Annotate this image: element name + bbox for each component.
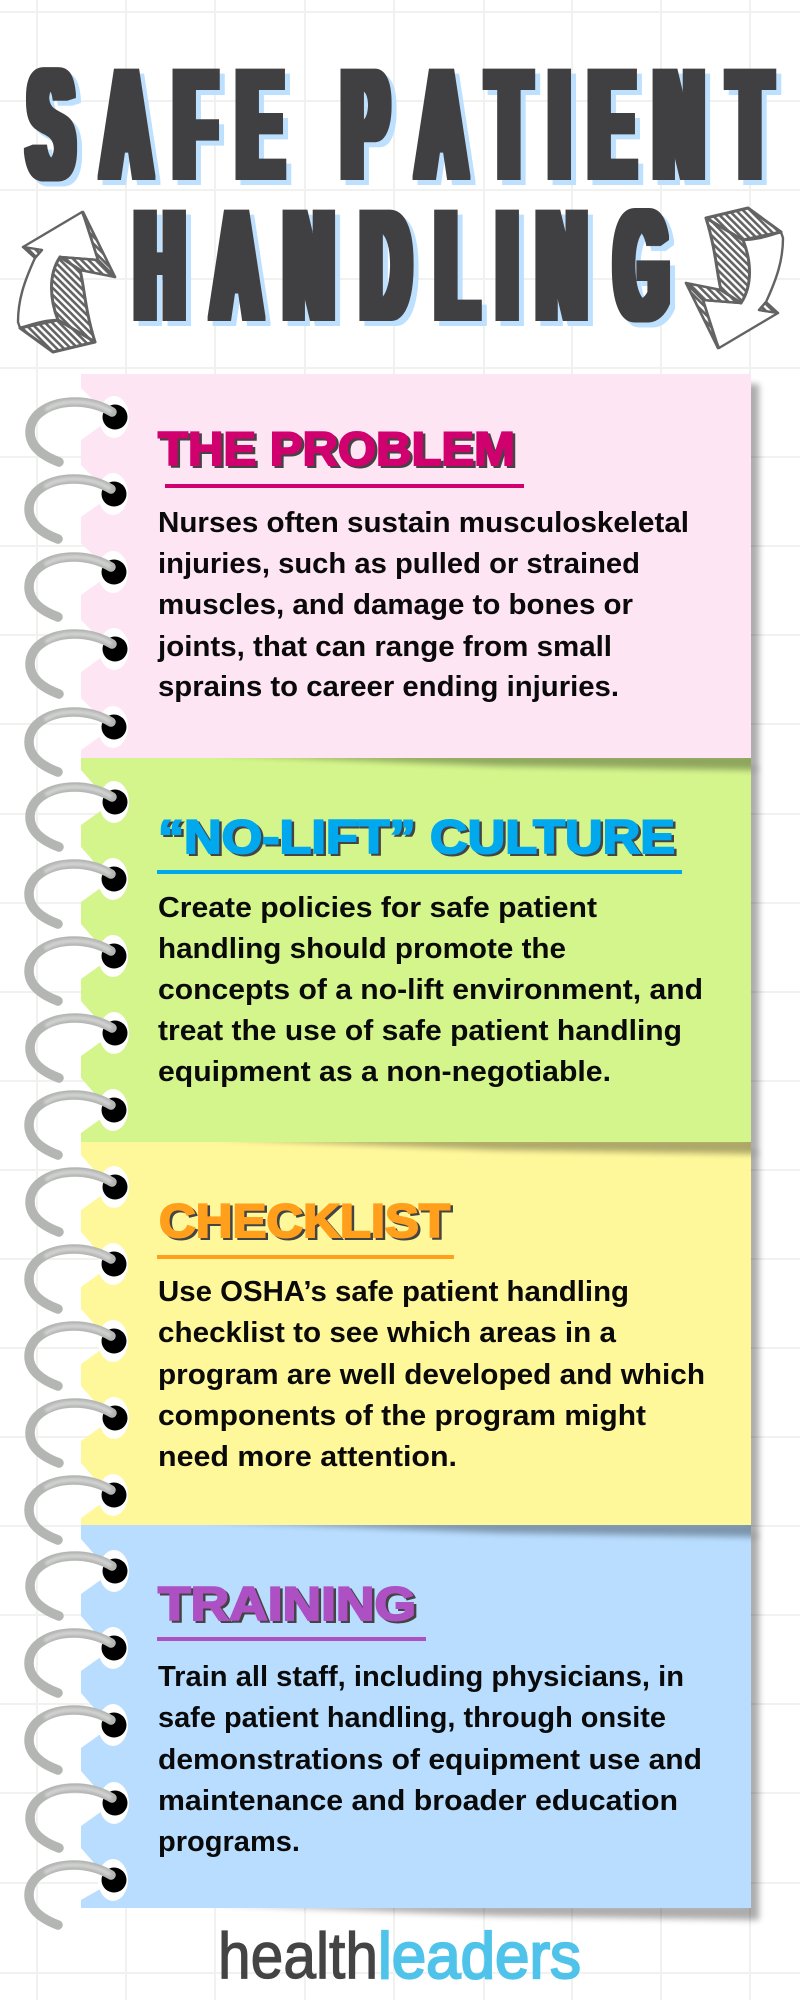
- panel: the problem: [81, 374, 759, 770]
- logo: healthleaders: [218, 1919, 581, 1992]
- panel background: [81, 758, 751, 1142]
- text block: checklist: checklist to see which areas in a: [158, 1317, 617, 1349]
- text block: training: [158, 1661, 702, 1858]
- panel background: [81, 1525, 751, 1908]
- spiral binding rings: [29, 396, 129, 1925]
- heading: no-lift culture: “NO-LIFT” CULTURE: [160, 812, 678, 865]
- text block: checklist: [158, 1276, 705, 1473]
- text block: no-lift culture: equipment as a non-negotiable.: [158, 1056, 611, 1088]
- logo: healthleaders: health: [218, 1919, 378, 1992]
- heading: the problem: THE PROBLEM: [158, 422, 515, 475]
- text block: no-lift culture: treat the use of safe patient handling: [158, 1015, 682, 1047]
- text block: no-lift culture: handling should promote the: [158, 933, 566, 965]
- panel background: [81, 1142, 751, 1525]
- panel: checklist: [81, 1142, 759, 1537]
- panel shadow: [200, 1535, 759, 1920]
- panel shadow: [200, 768, 759, 1154]
- heading: no-lift culture: “NO-LIFT” CULTURE: [158, 810, 675, 863]
- text block: training: demonstrations of equipment use and: [158, 1744, 702, 1776]
- heading: checklist: CHECKLIST: [162, 1196, 453, 1249]
- title text: HANDLING: [136, 179, 667, 353]
- text block: the problem: [157, 507, 689, 703]
- text block: training: safe patient handling, through onsite: [158, 1702, 666, 1734]
- text block: training: maintenance and broader education: [158, 1785, 678, 1817]
- text block: checklist: components of the program might: [158, 1400, 646, 1432]
- panel background: [81, 374, 751, 758]
- heading underline: [157, 1255, 454, 1259]
- text block: checklist: need more attention.: [158, 1441, 457, 1473]
- title text: [29, 38, 770, 353]
- heading underline: [157, 870, 682, 874]
- text block: training: programs.: [158, 1826, 300, 1858]
- heading: checklist: CHECKLIST: [159, 1194, 450, 1247]
- title shadow: SAFE PATIENT: [34, 43, 775, 217]
- text block: the problem: Nurses often sustain musculoskeletal: [158, 507, 689, 539]
- text block: the problem: joints, that can range from small: [157, 631, 612, 663]
- heading: training: TRAINING: [158, 1577, 416, 1630]
- text block: checklist: Use OSHA’s safe patient handling: [158, 1276, 629, 1308]
- title shadow: HANDLING: [141, 184, 672, 358]
- text block: no-lift culture: [158, 892, 703, 1088]
- heading: the problem: THE PROBLEM: [160, 424, 518, 477]
- text block: checklist: program are well developed and which: [158, 1359, 705, 1391]
- panel shadow: [200, 384, 759, 770]
- text block: the problem: sprains to career ending injuries.: [158, 671, 619, 703]
- panel: training: [81, 1525, 759, 1920]
- heading underline: [165, 484, 524, 488]
- text block: training: Train all staff, including physicians, in: [158, 1661, 684, 1693]
- title shadow: [34, 43, 775, 358]
- title: Safe Patient Handling: [29, 38, 775, 358]
- heading underline: [157, 1637, 426, 1641]
- panel shadow: [200, 1152, 759, 1537]
- text block: the problem: injuries, such as pulled or strained: [158, 548, 640, 580]
- icon: hand-drawn down arrow: [686, 208, 783, 348]
- icon: hand-drawn up arrow: [18, 212, 115, 352]
- text block: no-lift culture: Create policies for safe patient: [158, 892, 597, 924]
- title text: SAFE PATIENT: [29, 38, 770, 212]
- panel: no-lift culture: [81, 758, 759, 1154]
- text block: no-lift culture: concepts of a no-lift environment, and: [158, 974, 703, 1006]
- heading: training: TRAINING: [160, 1579, 418, 1632]
- text block: the problem: muscles, and damage to bones or: [158, 589, 633, 621]
- logo: healthleaders: leaders: [378, 1919, 581, 1992]
